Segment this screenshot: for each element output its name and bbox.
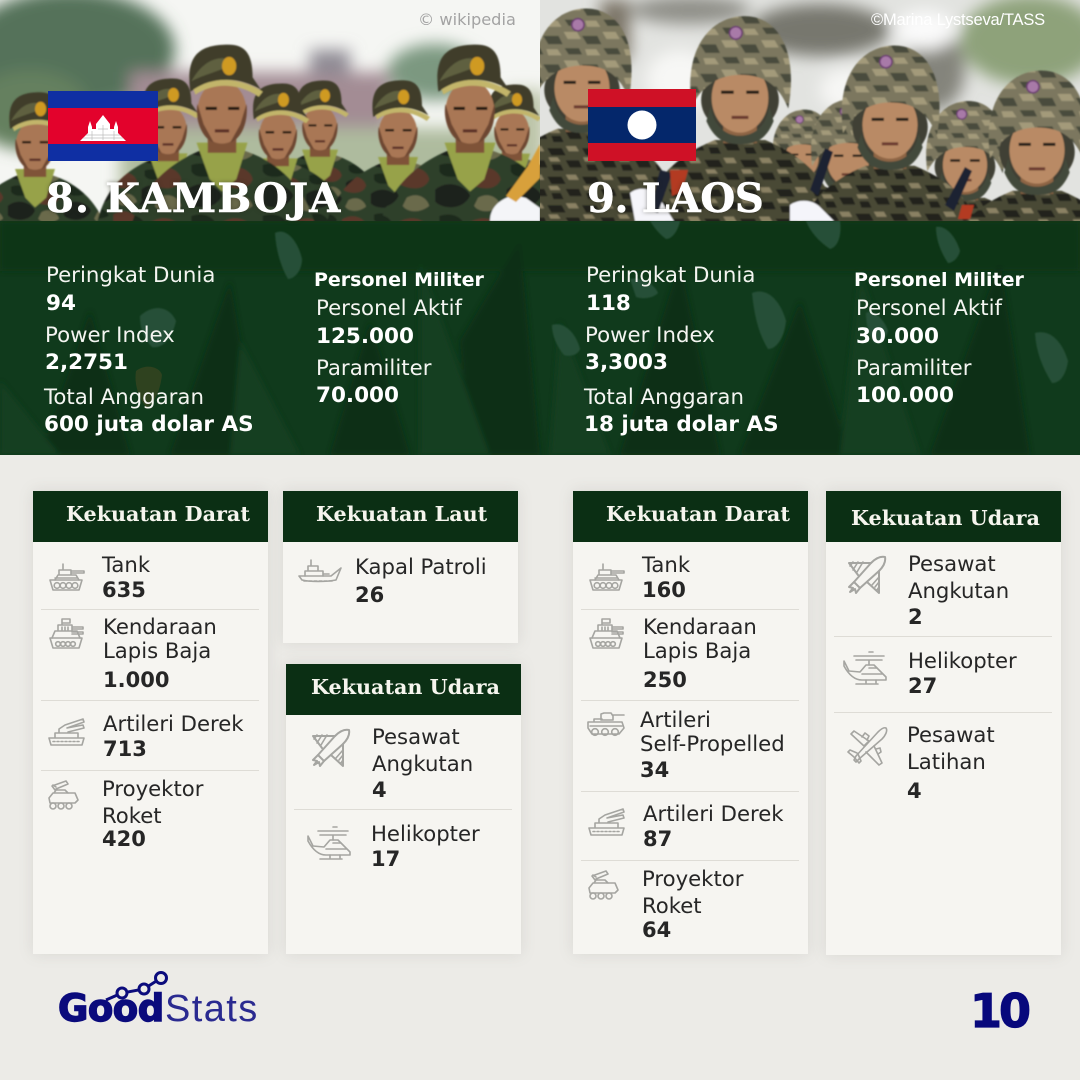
item: towed artillery: Artileri Derek [103,711,244,736]
photo credit: TASS: ©Marina Lystseva/TASS [871,11,1045,29]
item: rocket projector: Proyektor [102,776,203,801]
heading: Kekuatan Udara: Kekuatan Udara [311,675,500,699]
heading: Kekuatan Darat: Kekuatan Darat [606,502,790,526]
item: armored vehicle: Kendaraan [103,614,217,639]
item: transport aircraft [294,715,512,810]
stats: Cambodia personnel: 70.000 [316,383,399,408]
stats: Laos ranking and budget: Peringkat Dunia [586,262,755,288]
photo: Cambodian soldiers [0,0,540,221]
heading: Kekuatan Laut: Kekuatan Laut [316,502,487,526]
stats: Laos ranking and budget [584,262,779,437]
item: tank: 635 [102,578,146,602]
item: transport aircraft: Pesawat [908,551,996,576]
item: rocket projector: Roket [642,893,702,918]
stats: Laos personnel: Personel Aktif [856,296,1002,320]
stats: Laos ranking and budget: Power Index [585,322,715,348]
item: transport aircraft: Angkutan [372,751,473,776]
item: tank: Tank [642,552,690,577]
item: self-propelled artillery: 34 [640,758,669,782]
item: armored vehicle: Lapis Baja [103,638,211,663]
heading: Kekuatan Udara [286,664,521,715]
item: trainer aircraft: Latihan [907,749,986,774]
title: Laos: 9. LAOS [587,175,763,222]
heading: Kekuatan Darat [573,491,808,542]
item: towed artillery: 713 [103,737,147,761]
item: transport aircraft: 4 [372,778,387,802]
item: towed artillery: 87 [643,827,672,851]
item: self-propelled artillery: Artileri [640,707,711,732]
logo: GoodStats [58,971,259,1030]
panel: Laos air forces [826,491,1061,955]
item: transport aircraft [834,542,1052,637]
item: towed artillery [41,701,259,771]
item: towed artillery [581,792,799,861]
stats: Cambodia ranking and budget: Total Anggaran [44,384,204,410]
item: helicopter [834,637,1052,713]
item: patrol ship [298,554,487,607]
stats: Laos ranking and budget: Total Anggaran [584,384,744,410]
stats: Cambodia ranking and budget: 94 [46,291,76,316]
stats: Cambodia ranking and budget: Power Index [45,322,175,348]
stats: Laos personnel: Personel Militer [854,269,1024,291]
title: Kamboja: 8. KAMBOJA [46,175,342,222]
item: trainer aircraft: Pesawat [907,722,995,747]
stats: Laos ranking and budget: 18 juta dolar AS [584,412,779,437]
flag: Cambodia [48,91,158,161]
item: tank [41,542,259,610]
stats: Cambodia personnel [314,269,484,408]
item: armored vehicle: Kendaraan [643,614,757,639]
item: rocket projector: 420 [102,827,146,851]
item: transport aircraft: Angkutan [908,578,1009,603]
stats: Laos personnel: 30.000 [856,324,939,349]
item: rocket projector: Roket [102,803,162,828]
item: patrol ship: Kapal Patroli [355,554,487,579]
heading: Kekuatan Udara: Kekuatan Udara [851,506,1040,530]
item: tank [581,542,799,610]
item: armored vehicle: 250 [643,668,687,692]
item: helicopter: Helikopter [908,648,1017,673]
item: towed artillery: Artileri Derek [643,801,784,826]
stats: Cambodia ranking and budget: Peringkat Dunia [46,262,215,288]
item: armored vehicle [581,610,799,701]
item: armored vehicle: 1.000 [103,668,169,692]
stats: Cambodia personnel: Personel Militer [314,269,484,291]
flag: Laos [588,89,696,161]
item: armored vehicle: Lapis Baja [643,638,751,663]
page number: 10 [970,984,1028,1038]
item: helicopter: 17 [371,847,400,871]
logo: GoodStats: Good [58,987,164,1030]
item: rocket projector [588,866,744,942]
item: patrol ship: 26 [355,583,384,607]
heading: Kekuatan Darat [33,491,268,542]
stats: Cambodia ranking and budget: 600 juta dolar AS [44,412,254,437]
stats: Laos personnel [854,269,1024,408]
stats: Cambodia personnel: 125.000 [316,324,414,349]
panel: Cambodia air forces [286,664,521,954]
item: self-propelled artillery [581,701,799,792]
panel: Laos land forces [573,491,808,954]
item: self-propelled artillery: Self-Propelled [640,731,785,756]
item: tank: Tank [102,552,150,577]
item: rocket projector [48,776,204,851]
photo: Lao soldiers [540,0,1080,221]
heading: Kekuatan Udara [826,491,1061,542]
heading: Kekuatan Laut [283,491,518,542]
item: armored vehicle [41,610,259,701]
item: helicopter [307,821,480,871]
stats: Laos personnel: Paramiliter [856,356,971,380]
stats: Cambodia personnel: Paramiliter [316,356,431,380]
item: helicopter: Helikopter [371,821,480,846]
item: transport aircraft: Pesawat [372,724,460,749]
item: rocket projector: Proyektor [642,866,743,891]
item: trainer aircraft [847,722,995,803]
logo: GoodStats: Stats [165,988,259,1030]
heading: Kekuatan Darat: Kekuatan Darat [66,502,250,526]
stats: Cambodia ranking and budget [44,262,254,437]
panel: statistics background [0,221,1080,455]
stats: Laos personnel: 100.000 [856,383,954,408]
stats: Cambodia ranking and budget: 2,2751 [45,350,128,375]
item: rocket projector: 64 [642,918,671,942]
item: helicopter: 27 [908,674,937,698]
panel: Cambodia naval forces [283,491,518,643]
stats: Laos ranking and budget: 118 [586,291,631,316]
item: trainer aircraft: 4 [907,779,922,803]
item: tank: 160 [642,578,686,602]
stats: Laos ranking and budget: 3,3003 [585,350,668,375]
panel: Cambodia land forces [33,491,268,954]
photo credit: wikipedia: © wikipedia [418,10,516,29]
stats: Cambodia personnel: Personel Aktif [316,296,462,320]
item: transport aircraft: 2 [908,605,923,629]
